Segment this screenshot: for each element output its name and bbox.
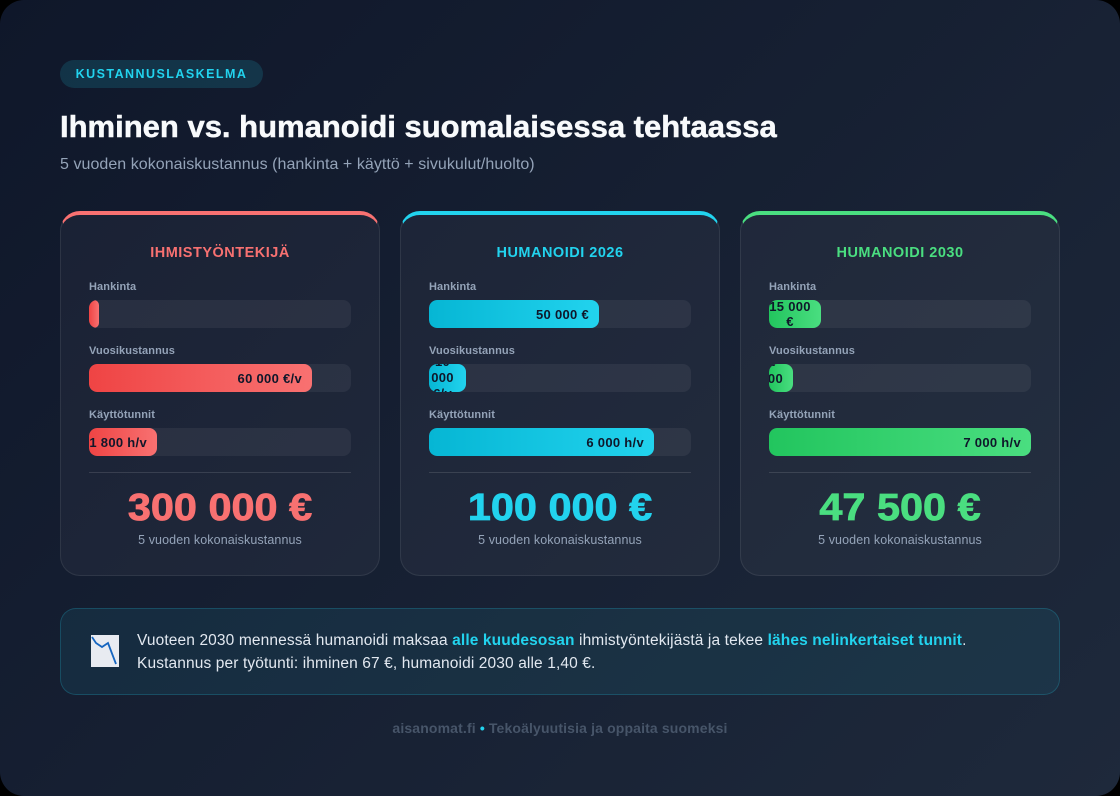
bar: käyttötunnit <box>429 428 691 456</box>
label: käyttötunnit: Käyttötunnit <box>89 409 155 421</box>
bar: käyttötunnit: 1 800 h/v <box>89 434 147 450</box>
label: käyttötunnit: Käyttötunnit <box>769 409 835 421</box>
footer: aisanomat.fi • Tekoälyuutisia ja oppaita suomeksi <box>392 720 728 736</box>
panel: humanoidi 2030 <box>740 211 1060 576</box>
bar: käyttötunnit: 7 000 h/v <box>963 434 1021 450</box>
badge: kustannuslaskelma: KUSTANNUSLASKELMA <box>76 67 247 81</box>
subtitle: 5 vuoden kokonaiskustannus (hankinta + käyttö + sivukulut/huolto) <box>60 156 535 173</box>
bar: vuosikustannus: 60 000 €/v <box>238 370 302 386</box>
total caption: 5 vuoden kokonaiskustannus <box>478 533 642 547</box>
icon: falling chart <box>91 635 119 667</box>
bar: hankinta <box>429 300 691 328</box>
total caption: 5 vuoden kokonaiskustannus <box>138 533 302 547</box>
label: vuosikustannus: Vuosikustannus <box>89 345 175 357</box>
label: hankinta: Hankinta <box>769 281 816 293</box>
title: Ihminen vs. humanoidi suomalaisessa tehtaassa <box>60 109 777 144</box>
bar: vuosikustannus <box>89 364 351 392</box>
label: käyttötunnit: Käyttötunnit <box>429 409 495 421</box>
label: vuosikustannus: Vuosikustannus <box>769 345 855 357</box>
bar: vuosikustannus <box>769 364 1031 392</box>
total cost: 100 000 € <box>468 487 652 529</box>
bar: käyttötunnit <box>769 428 1031 456</box>
callout text: Vuoteen 2030 mennessä humanoidi maksaa alle kuudesosan ihmistyöntekijästä ja tekee lähes nelinkertaiset tunnit. <box>137 632 966 649</box>
badge: kustannuslaskelma <box>60 60 263 88</box>
total cost: 47 500 € <box>819 487 981 529</box>
panel heading: HUMANOIDI 2026 <box>496 245 624 261</box>
panel heading: IHMISTYÖNTEKIJÄ <box>150 245 290 261</box>
label: hankinta: Hankinta <box>429 281 476 293</box>
callout text: Kustannus per työtunti: ihminen 67 €, humanoidi 2030 alle 1,40 €. <box>137 655 595 672</box>
panel heading: HUMANOIDI 2030 <box>836 245 964 261</box>
label: vuosikustannus: Vuosikustannus <box>429 345 515 357</box>
bar: hankinta: 50 000 € <box>536 306 589 322</box>
bar: hankinta <box>769 300 1031 328</box>
total cost: 300 000 € <box>128 487 312 529</box>
label: hankinta: Hankinta <box>89 281 136 293</box>
bar: vuosikustannus <box>429 364 691 392</box>
bar: hankinta <box>89 300 351 328</box>
callout text <box>137 632 966 672</box>
total caption: 5 vuoden kokonaiskustannus <box>818 533 982 547</box>
bar: käyttötunnit: 6 000 h/v <box>586 434 644 450</box>
panel: ihmistyöntekijä <box>60 211 380 576</box>
bar: käyttötunnit <box>89 428 351 456</box>
callout <box>60 608 1060 695</box>
panel: humanoidi 2026 <box>400 211 720 576</box>
